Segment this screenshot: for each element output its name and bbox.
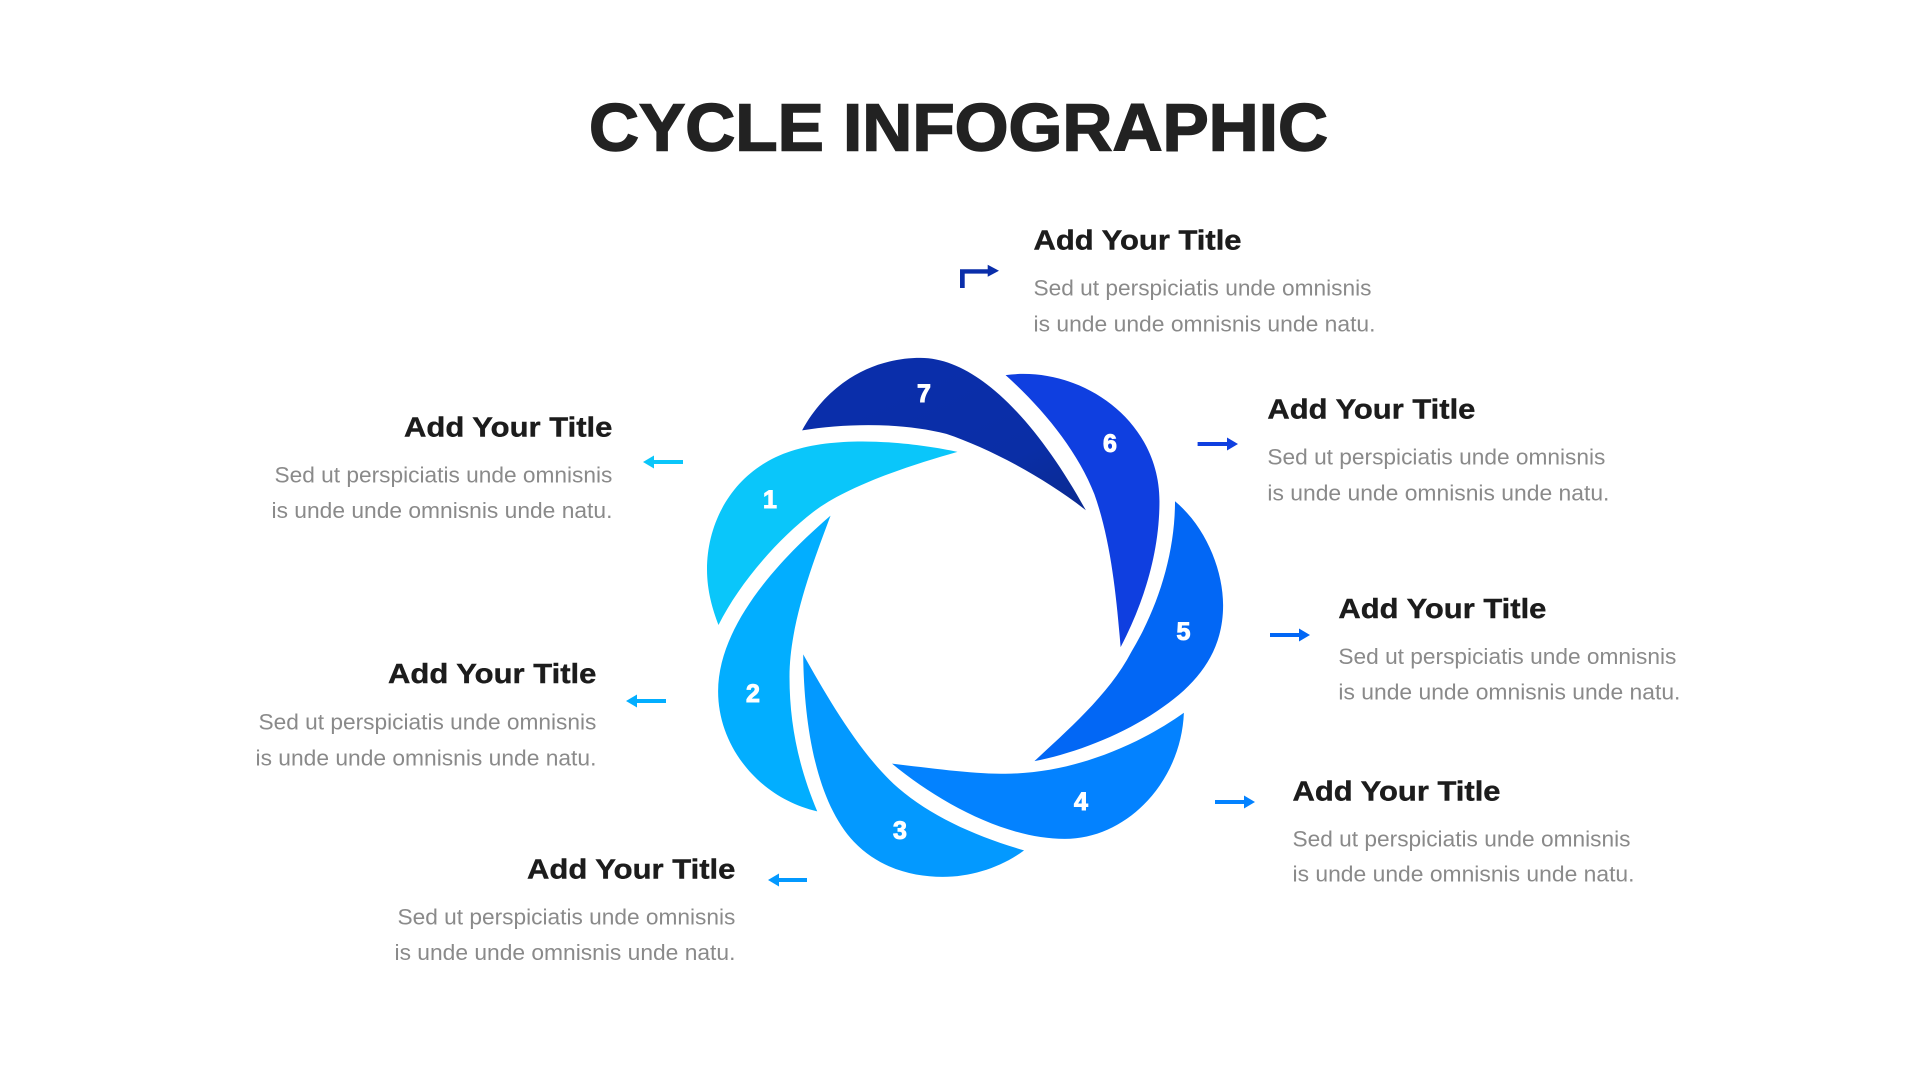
text block 5: Add Your Title [1338, 593, 1546, 624]
numbers: 5 [1177, 618, 1191, 646]
text block 3: Add Your Title [527, 853, 735, 884]
text block 2: is unde unde omnisnis unde natu. [256, 745, 596, 770]
text block 2 [256, 658, 596, 770]
text block 5 [1338, 593, 1680, 704]
text block 3 [394, 853, 735, 965]
segment 6 [1006, 374, 1159, 647]
segment 5 [1034, 501, 1223, 761]
text block 1 [272, 412, 612, 523]
segment 1 [707, 441, 957, 625]
arrow 7 [960, 265, 999, 288]
text block 7: Sed ut perspiciatis unde omnisnis [1034, 275, 1372, 300]
text block 2: Add Your Title [388, 658, 596, 689]
text block 4 [1292, 775, 1634, 887]
arrow 3 [768, 874, 807, 886]
arrow 6 [1198, 438, 1238, 450]
numbers [746, 380, 1191, 845]
text block 5: Sed ut perspiciatis unde omnisnis [1338, 644, 1676, 669]
text block 3: is unde unde omnisnis unde natu. [394, 940, 735, 965]
numbers: 4 [1074, 788, 1088, 816]
arrow 2 [626, 694, 666, 708]
numbers: 7 [917, 380, 931, 408]
title: CYCLE INFOGRAPHIC [589, 90, 1328, 166]
text block 6 [1267, 393, 1609, 506]
cycle diagram [707, 358, 1223, 877]
text block 6: Add Your Title [1267, 393, 1475, 424]
segment 2 [718, 516, 831, 811]
text block 2: Sed ut perspiciatis unde omnisnis [258, 710, 596, 734]
text block 3: Sed ut perspiciatis unde omnisnis [398, 904, 735, 930]
text block 4: Add Your Title [1292, 775, 1500, 806]
text block 4: is unde unde omnisnis unde natu. [1292, 862, 1634, 887]
arrow 5 [1270, 628, 1310, 642]
numbers: 3 [893, 817, 907, 845]
numbers: 2 [746, 680, 760, 708]
text block 1: is unde unde omnisnis unde natu. [272, 498, 612, 523]
text block 6: is unde unde omnisnis unde natu. [1267, 480, 1609, 506]
text block 7: Add Your Title [1034, 224, 1242, 255]
numbers: 1 [763, 486, 777, 514]
text block 6: Sed ut perspiciatis unde omnisnis [1267, 444, 1605, 469]
text block 5: is unde unde omnisnis unde natu. [1338, 679, 1680, 704]
text block 4: Sed ut perspiciatis unde omnisnis [1292, 826, 1630, 851]
text block 1: Add Your Title [404, 412, 612, 443]
segment 4 [892, 713, 1184, 839]
arrow 4 [1215, 796, 1255, 808]
segment 7 [802, 358, 1086, 510]
text block 7 [1034, 224, 1376, 336]
numbers: 6 [1103, 430, 1117, 458]
text block 7: is unde unde omnisnis unde natu. [1034, 312, 1376, 336]
segment 3 [803, 654, 1024, 877]
text block 1: Sed ut perspiciatis unde omnisnis [274, 463, 612, 488]
arrow 1 [643, 456, 683, 468]
